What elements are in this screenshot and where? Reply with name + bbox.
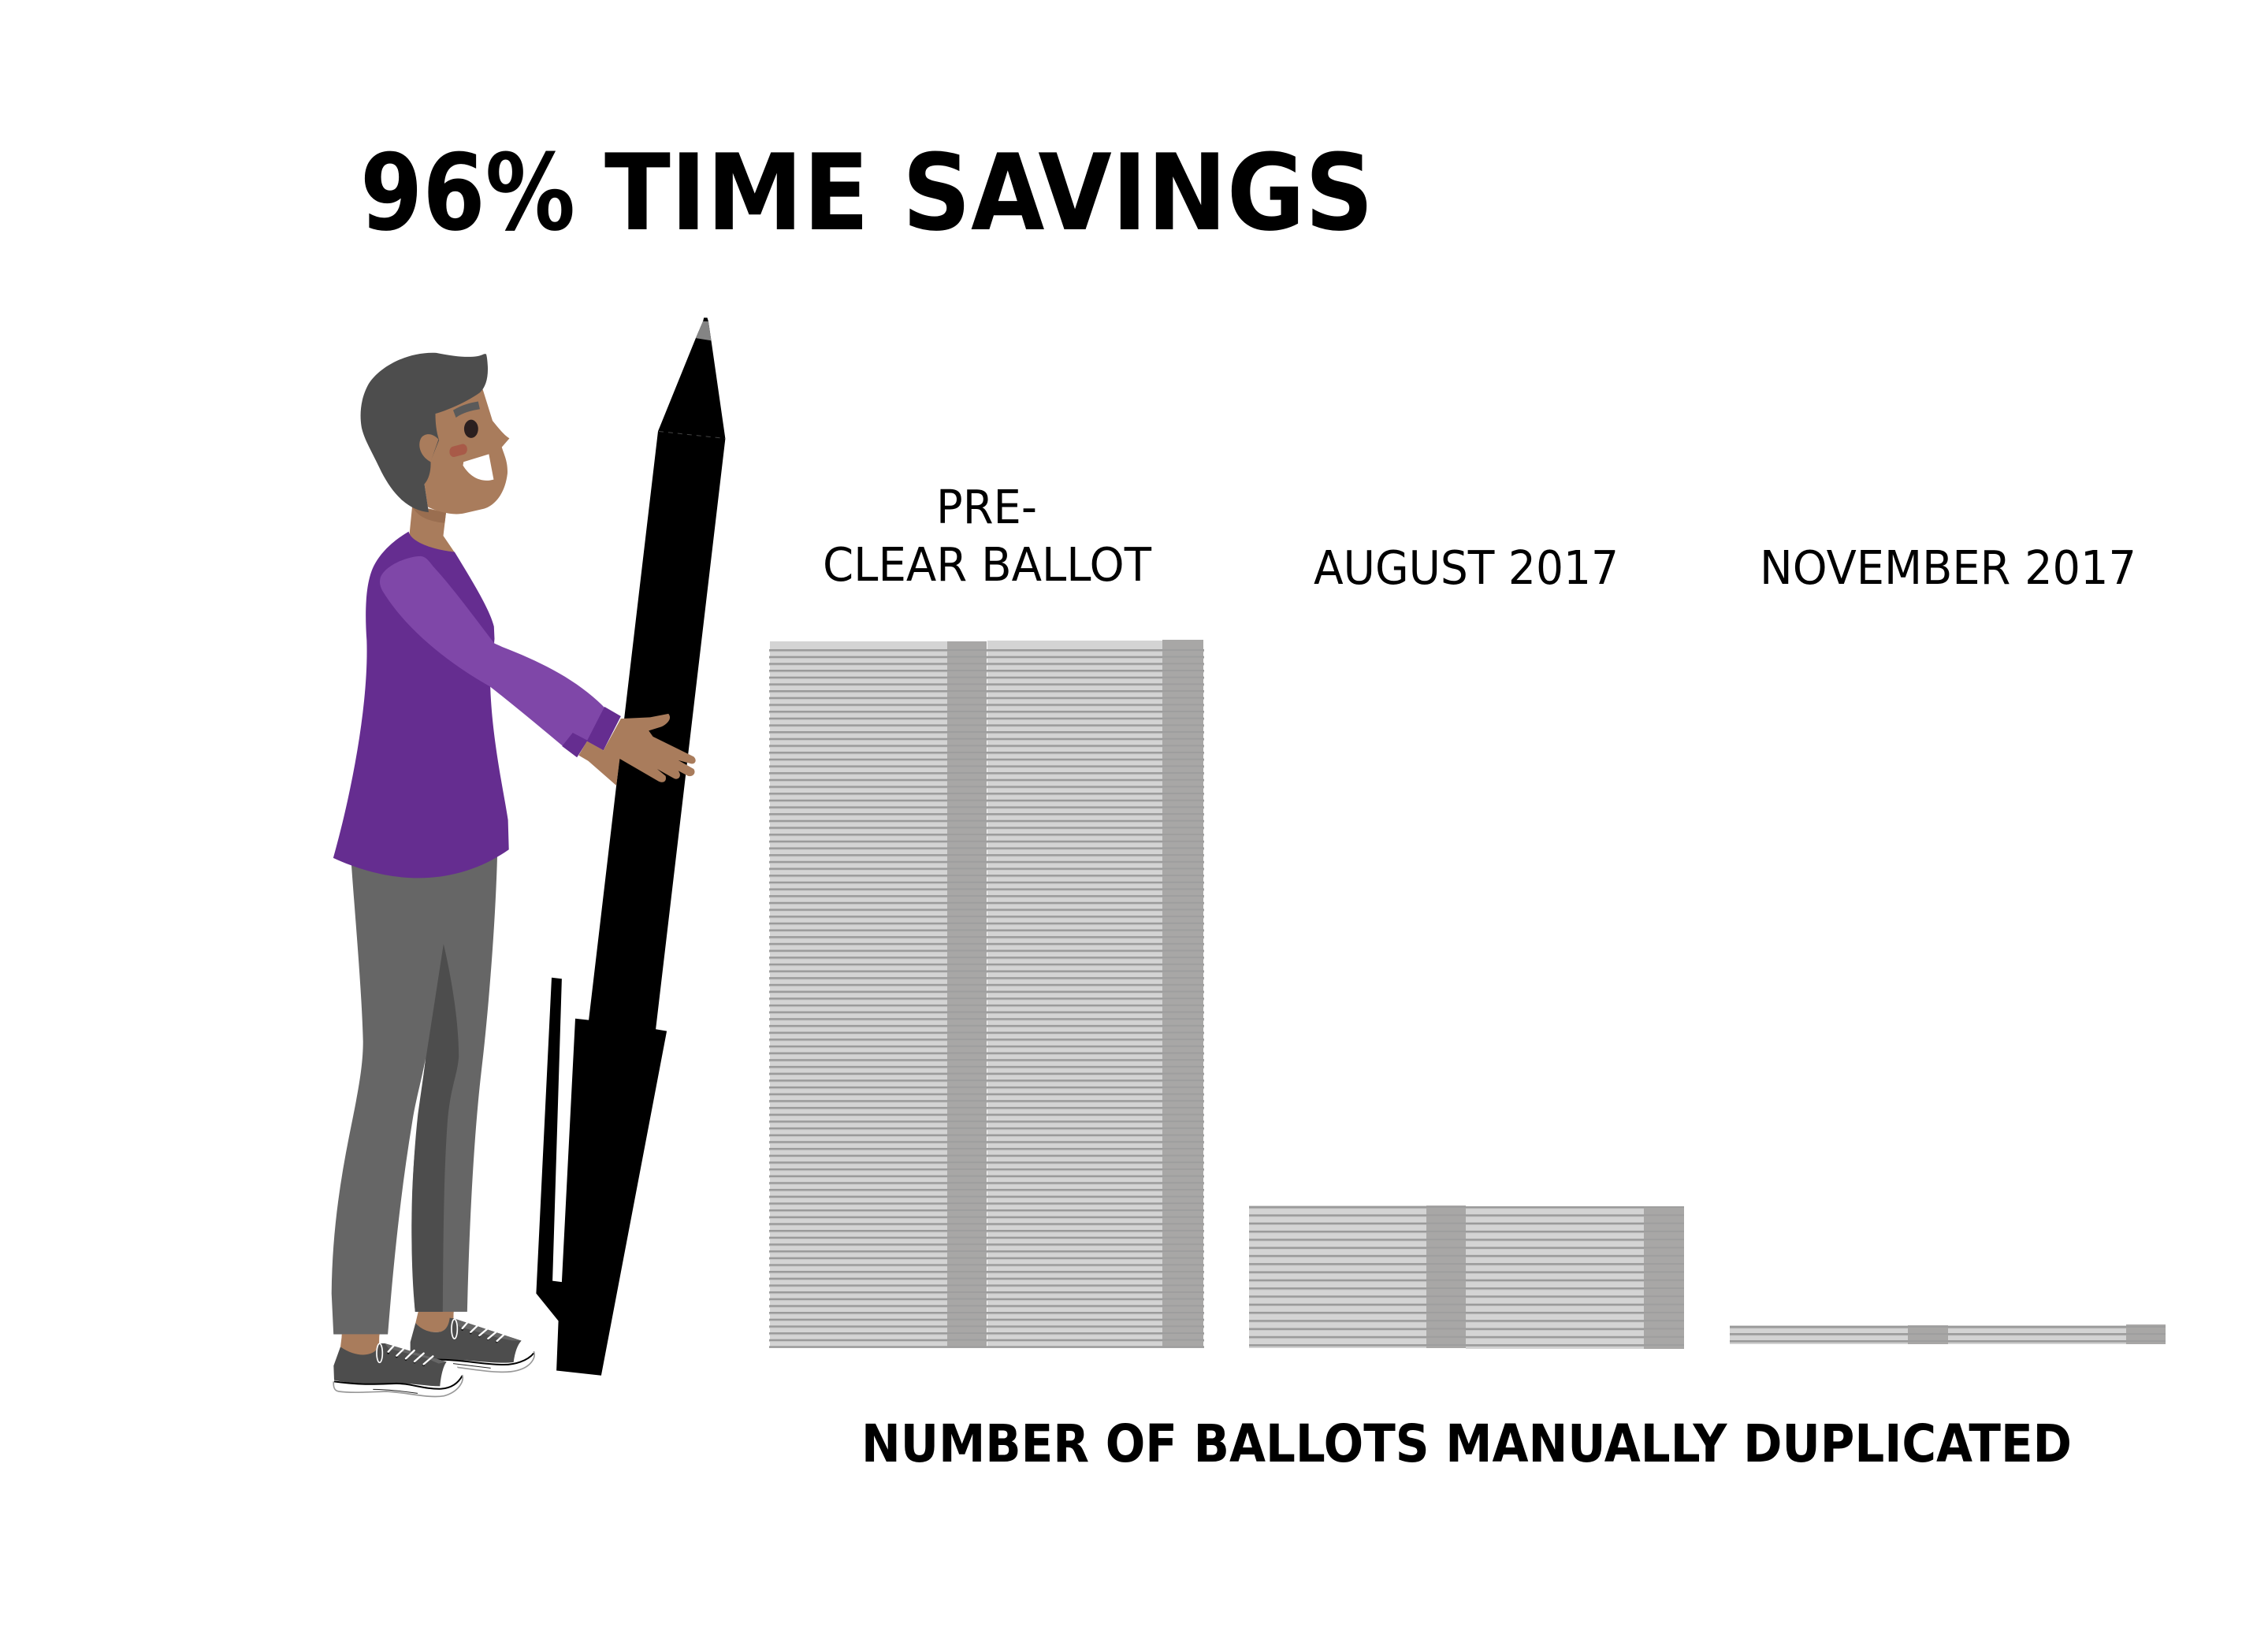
eye <box>464 420 478 438</box>
illustration: person holding pen <box>332 353 696 1396</box>
sleeve <box>380 556 605 746</box>
stack: August 2017 <box>1249 1205 1684 1349</box>
stack: pre-Clear Ballot <box>769 640 1204 1348</box>
label: November 2017: NOVEMBER 2017 <box>1760 541 2136 595</box>
front shoe <box>333 1334 463 1396</box>
label: pre-Clear Ballot <box>823 480 1152 592</box>
upper body <box>333 353 696 878</box>
title <box>360 132 1374 254</box>
label: August 2017: AUGUST 2017 <box>1314 541 1619 595</box>
label: pre-Clear Ballot: CLEAR BALLOT <box>823 537 1152 592</box>
stack: November 2017 <box>1730 1324 2166 1344</box>
legs <box>332 854 497 1358</box>
ear <box>419 434 438 462</box>
axis caption: NUMBER OF BALLOTS MANUALLY DUPLICATED <box>861 1414 2072 1474</box>
icon: giant pen <box>536 318 725 1376</box>
shoes <box>333 1312 534 1396</box>
hand <box>578 714 696 786</box>
cheek <box>454 449 463 451</box>
title: SAVINGS <box>902 132 1374 254</box>
shirt <box>333 532 509 878</box>
title: TIME <box>604 132 869 254</box>
mouth <box>463 454 493 481</box>
title: 96% <box>360 132 575 254</box>
hair <box>361 353 488 512</box>
brow <box>453 401 480 418</box>
face <box>425 389 509 514</box>
label: pre-Clear Ballot: PRE- <box>936 480 1037 534</box>
rear shoe <box>411 1312 534 1372</box>
